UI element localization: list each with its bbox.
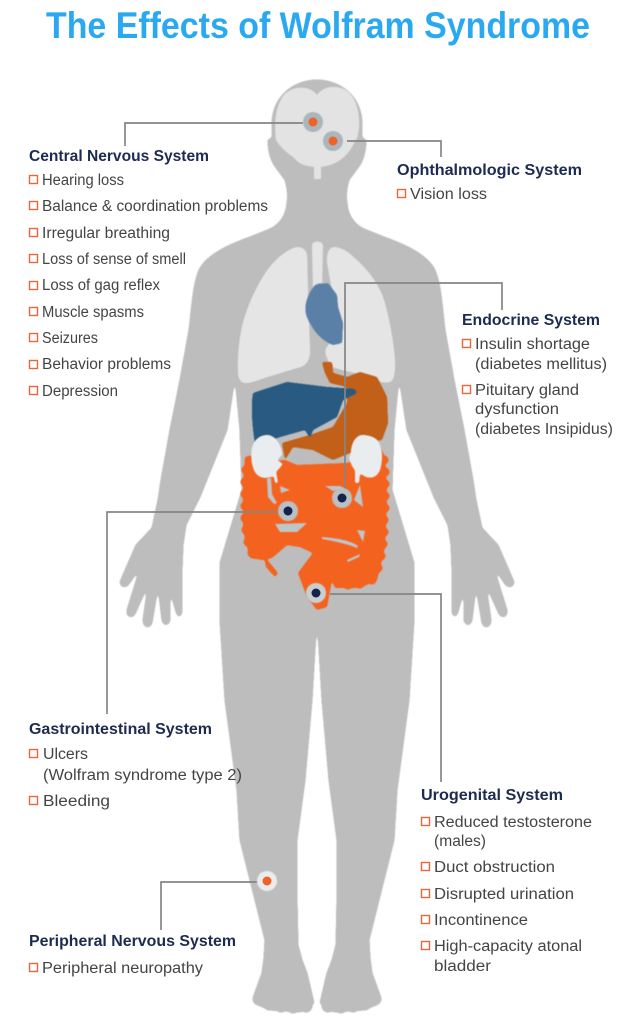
- leader line: peripheral nervous system: [161, 882, 258, 930]
- text block: urogenital system: [421, 787, 592, 975]
- text block: gastrointestinal system: Bleeding: [43, 793, 110, 810]
- text block: central nervous system: Loss of gag reflex: [42, 277, 160, 294]
- text block: central nervous system: Central Nervous System: [29, 148, 209, 165]
- marker: brain central: [303, 112, 323, 132]
- text block: gastrointestinal system: (Wolfram syndrome type 2): [43, 767, 242, 784]
- text block: central nervous system: Hearing loss: [42, 172, 124, 189]
- text block: peripheral nervous system: Peripheral neuropathy: [42, 960, 203, 977]
- lungs: [238, 247, 395, 383]
- text block: peripheral nervous system: [29, 933, 236, 977]
- text block: central nervous system: Seizures: [42, 330, 98, 347]
- leader line: endocrine system: [345, 283, 502, 490]
- text block: endocrine system: dysfunction: [475, 401, 559, 418]
- text block: endocrine system: Pituitary gland: [475, 382, 579, 399]
- kidneys: [251, 435, 382, 483]
- text block: gastrointestinal system: [29, 721, 242, 810]
- text block: central nervous system: [29, 148, 268, 400]
- text block: urogenital system: Duct obstruction: [434, 859, 555, 876]
- text block: endocrine system: [462, 312, 613, 438]
- text block: central nervous system: Balance & coordination problems: [42, 198, 268, 215]
- text block: endocrine system: (diabetes Insipidus): [475, 421, 613, 438]
- text block: urogenital system: Incontinence: [434, 912, 528, 929]
- intestines: [240, 443, 390, 610]
- text block: central nervous system: Loss of sense of smell: [42, 251, 186, 268]
- text block: urogenital system: Reduced testosterone: [434, 814, 592, 831]
- leader line: gastrointestinal system: [107, 512, 278, 714]
- marker: leg: [257, 871, 277, 891]
- text block: ophthalmologic system: Vision loss: [410, 186, 487, 203]
- text block: urogenital system: bladder: [434, 958, 491, 975]
- marker: bladder: [306, 583, 326, 603]
- text block: ophthalmologic system: Ophthalmologic System: [397, 162, 582, 179]
- body silhouette: [120, 80, 514, 1013]
- marker: pancreas: [332, 488, 352, 508]
- text block: urogenital system: High-capacity atonal: [434, 938, 582, 955]
- brain: [275, 87, 359, 179]
- marker: eye: [323, 131, 343, 151]
- text block: gastrointestinal system: Gastrointestinal System: [29, 721, 212, 738]
- text block: urogenital system: (males): [434, 833, 486, 850]
- text block: gastrointestinal system: Ulcers: [43, 746, 88, 763]
- text block: central nervous system: Muscle spasms: [42, 304, 144, 321]
- text block: central nervous system: Behavior problems: [42, 356, 171, 373]
- heart: [305, 283, 343, 345]
- text block: endocrine system: (diabetes mellitus): [475, 356, 607, 373]
- text block: endocrine system: Insulin shortage: [475, 336, 590, 353]
- text block: urogenital system: Disrupted urination: [434, 886, 574, 903]
- leader line: urogenital system: [330, 594, 441, 782]
- text block: endocrine system: Endocrine System: [462, 312, 600, 329]
- text block: central nervous system: Irregular breathing: [42, 225, 170, 242]
- liver: [252, 382, 357, 443]
- title: The Effects of Wolfram Syndrome: [46, 5, 590, 46]
- leader line: ophthalmologic system: [347, 141, 441, 157]
- text block: central nervous system: Depression: [42, 383, 118, 400]
- text block: ophthalmologic system: [397, 162, 582, 203]
- text block: urogenital system: Urogenital System: [421, 787, 563, 804]
- leader line: central nervous system: [125, 123, 303, 146]
- trachea: [312, 242, 323, 290]
- text block: peripheral nervous system: Peripheral Nervous System: [29, 933, 236, 950]
- stomach: [282, 362, 388, 460]
- marker: intestine: [278, 501, 298, 521]
